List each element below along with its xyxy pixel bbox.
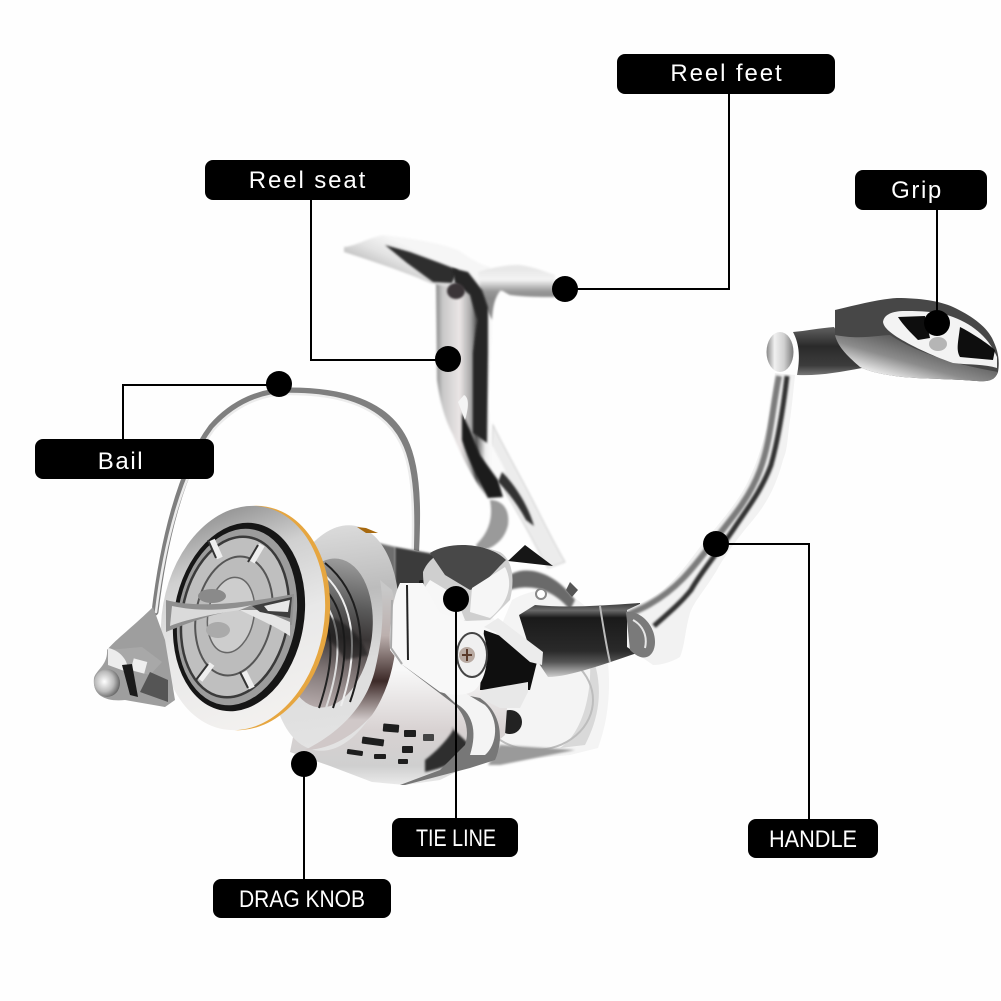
label: HANDLE [748,819,878,858]
handle ball joint [766,332,794,372]
label: Grip: Grip [891,177,943,204]
label: Reel feet: Reel feet [670,60,784,87]
rear wing disc [470,545,609,765]
bail arm and ball [94,607,175,707]
handle arm [626,373,795,665]
line spool with grooves [274,553,382,713]
label: Reel seat [205,160,410,200]
callout dots [266,276,950,777]
label: Reel seat: Reel seat [249,167,367,194]
fishing reel illustration [94,235,999,785]
stem and reel-foot bar [344,235,565,568]
spool front face [144,492,347,744]
label: TIE LINE: TIE LINE [416,825,496,852]
label: Bail: Bail [98,448,144,475]
label: Reel feet [617,54,835,94]
bail wire [155,391,417,612]
black cylinder of grip [793,327,862,375]
leader lines [123,94,937,879]
skirt cone [254,515,416,761]
label: DRAG KNOB: DRAG KNOB [239,886,365,913]
label: DRAG KNOB [213,879,391,918]
spool knob cross bar [166,589,294,638]
label: Bail [35,439,214,479]
label: HANDLE: HANDLE [769,826,857,853]
grip knob [835,298,999,381]
black tube to handle [519,603,640,677]
label: TIE LINE [392,818,518,857]
gear side: bail arm, screw, gearbox [390,545,543,785]
label: Grip [855,170,987,210]
rotor cup drum with perforations [290,530,512,785]
